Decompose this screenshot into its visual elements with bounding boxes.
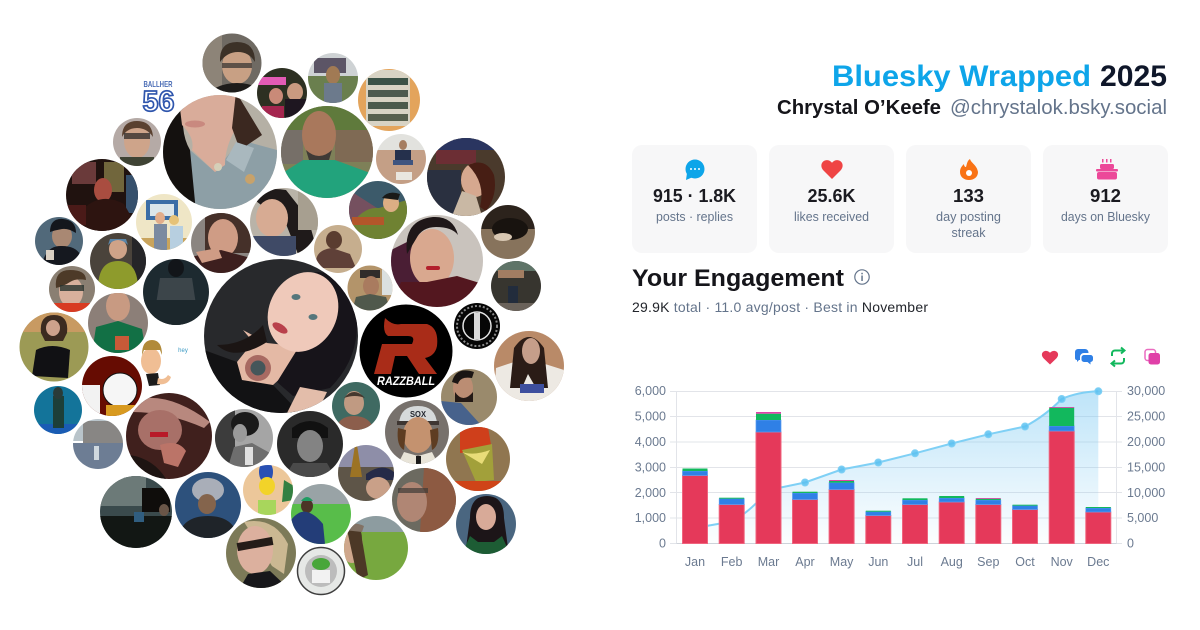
month labels: Feb (721, 555, 743, 569)
left axis labels: 0 (659, 536, 666, 550)
icon: birthday cake (1096, 159, 1118, 180)
avatar: neon sign couple (257, 68, 307, 118)
avatar: man in green tee (281, 106, 373, 198)
right axis labels: 20,000 (1127, 435, 1165, 449)
avatar: Eiffel tower selfie (338, 445, 394, 501)
avatar: Sox cap guy (385, 400, 449, 464)
avatar: Marge Simpson (243, 461, 294, 515)
avatar: Ballher 56 jersey: 56 (142, 86, 174, 118)
avatar: man with glasses top (202, 34, 262, 92)
month labels: Jul (907, 555, 923, 569)
month labels: Apr (795, 555, 815, 569)
title: 2025 (1100, 60, 1167, 93)
left axis labels: 4,000 (635, 435, 666, 449)
user name and handle: Chrystal O’Keefe (777, 97, 941, 119)
avatar: man in green shirt (88, 291, 148, 353)
left axis labels: 6,000 (635, 384, 666, 398)
avatar: tiny signature mark: hey (178, 348, 188, 354)
avatar: main selfie large (204, 259, 358, 413)
avatar: woman red lips (391, 215, 483, 307)
month labels: May (830, 555, 854, 569)
avatar cluster (19, 30, 564, 594)
line points (802, 388, 1102, 486)
avatar: dark space figure (143, 259, 209, 325)
user name and handle: @chrystalok.bsky.social (950, 97, 1167, 119)
right axis labels: 15,000 (1127, 460, 1165, 474)
month labels: Sep (977, 555, 999, 569)
avatar: man in fur hat (175, 472, 241, 538)
avatar: bearded man (441, 369, 497, 425)
avatar: Razzball logo: RAZZBALL (377, 374, 435, 388)
icon: speech bubble (686, 160, 704, 180)
bars: replies (682, 420, 1111, 516)
panel: day posting streak: 133 (953, 185, 984, 206)
panel: posts and replies: 915 · 1.8K (653, 185, 737, 206)
left axis labels: 3,000 (635, 460, 666, 474)
avatar: cartoon guitarist (349, 181, 407, 240)
icon: heart (821, 160, 843, 179)
cumulative area (695, 391, 1098, 544)
avatar: bitmoji woman waving (141, 340, 171, 386)
avatar: woman with red lips in car (126, 393, 212, 479)
month labels: Jun (868, 555, 888, 569)
heading: Your Engagement: Your Engagement (632, 265, 844, 292)
avatar: blonde with sunglasses (226, 518, 296, 588)
avatar: man by food truck (491, 261, 541, 311)
avatar: woman at ballpark (308, 53, 358, 103)
engagement summary: 29.9K total · 11.0 avg/post · Best in November (632, 299, 928, 315)
icon: legend heart (1042, 351, 1058, 364)
avatar: football helmet cartoon (82, 356, 142, 417)
avatar: denim jacket (160, 92, 280, 212)
icon: legend replies (1075, 349, 1093, 364)
avatar: green sweater (90, 233, 146, 289)
bars: likes (682, 431, 1111, 544)
icon: legend reposts (1112, 348, 1124, 366)
avatar: woman hand on chin (191, 213, 251, 273)
right axis labels: 10,000 (1127, 486, 1165, 500)
avatar: Colosseum (73, 419, 123, 469)
left axis labels: 1,000 (635, 511, 666, 525)
avatar: man on phone (314, 225, 362, 273)
right axis labels (1127, 384, 1165, 550)
panel: day posting streak: streak (952, 225, 986, 240)
month labels (685, 555, 1109, 569)
left axis labels: 5,000 (635, 410, 666, 424)
panel: days on Bluesky: days on Bluesky (1061, 209, 1150, 224)
month labels: Aug (941, 555, 963, 569)
right axis labels: 25,000 (1127, 410, 1165, 424)
panel: likes received: 25.6K (808, 185, 856, 206)
title: Bluesky Wrapped (832, 60, 1091, 93)
avatar: cartoon villain (446, 427, 510, 491)
avatar: man by green river (291, 484, 351, 544)
avatar: man against green wall (332, 382, 380, 430)
bars: reposts (682, 408, 1111, 512)
avatar: woman in flower field (19, 312, 89, 382)
month labels: Jan (685, 555, 705, 569)
avatar: black and white man in cap (277, 411, 343, 477)
avatar: woman glasses red hair (392, 468, 456, 532)
panel: day posting streak (906, 145, 1031, 253)
avatar: frog mascot emblem (298, 548, 344, 594)
right axis labels: 5,000 (1127, 511, 1158, 525)
avatar: woman in Mets jersey (494, 331, 564, 401)
icon: info (855, 270, 869, 284)
cumulative line (695, 391, 1098, 528)
avatar: man squatting on base (376, 134, 426, 184)
avatar: man looking down (35, 217, 83, 265)
avatar: singer on stage (34, 386, 82, 434)
avatar: cat on carpet (481, 205, 535, 259)
chart legend (1042, 348, 1160, 366)
panel: likes received: likes received (794, 209, 869, 224)
avatar: Bob's Burgers family (136, 194, 192, 252)
panel: day posting streak: day posting (936, 209, 1001, 224)
panel: likes received (769, 145, 894, 253)
bars: quotes (756, 407, 1074, 499)
avatar: woman at ballfield (341, 516, 408, 580)
panel: posts and replies (632, 145, 757, 253)
grid lines and axes (670, 391, 1122, 544)
avatar: Ballher 56 jersey (136, 72, 180, 118)
panel: posts and replies: posts · replies (656, 209, 733, 224)
avatar: black and white side profile (215, 409, 273, 467)
icon: legend quotes (1145, 350, 1160, 364)
avatar: Ballher 56 jersey: BALLHER (144, 79, 172, 89)
icon: flame (960, 159, 978, 180)
avatar: black circular emblem (454, 303, 500, 349)
avatar: woman in crowd (427, 138, 505, 216)
avatar: man with hat (347, 265, 393, 311)
panel: days on Bluesky: 912 (1090, 185, 1121, 206)
month labels: Nov (1051, 555, 1074, 569)
avatar: woman outdoors (250, 188, 318, 258)
chart: monthly engagement stacked bars with cumulative line (635, 384, 1165, 569)
right axis labels: 30,000 (1127, 384, 1165, 398)
month labels: Oct (1015, 555, 1035, 569)
avatar: smiling man glasses (113, 118, 161, 166)
left axis labels: 2,000 (635, 486, 666, 500)
left axis labels (635, 384, 666, 550)
avatar: woman in bar (66, 159, 138, 234)
user name and handle (777, 97, 1167, 119)
avatar: Sox cap guy: SOX (410, 410, 427, 419)
avatar: Razzball logo (359, 304, 453, 398)
panel: days on Bluesky (1043, 145, 1168, 253)
month labels: Mar (758, 555, 779, 569)
avatar: woman in green dress (456, 494, 516, 554)
avatar: merch display (358, 69, 420, 131)
avatar: curly hair with glasses (49, 266, 95, 313)
avatar: dark room window (100, 476, 172, 548)
month labels: Dec (1087, 555, 1109, 569)
right axis labels: 0 (1127, 536, 1134, 550)
